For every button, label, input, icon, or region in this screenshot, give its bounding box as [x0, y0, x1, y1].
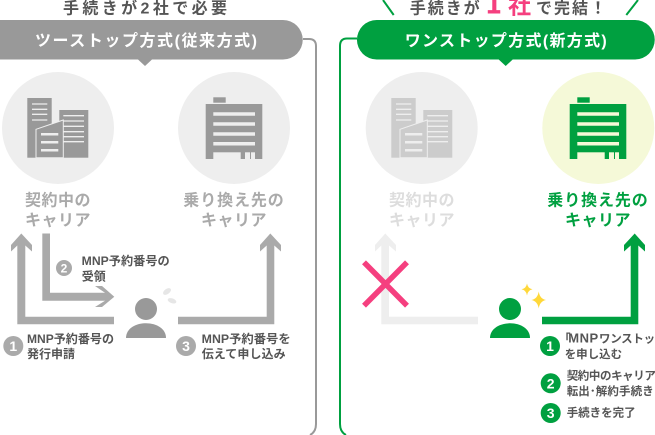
heading: needs two companies: 手続きが2社で必要	[63, 0, 227, 18]
step 3: 3	[182, 338, 190, 354]
icon: worried user	[126, 287, 177, 338]
current carrier label (disabled): キャリア	[389, 212, 455, 230]
step 2: 転出･解約手続き	[567, 384, 654, 398]
step 3: 手続きを完了	[567, 406, 636, 420]
current carrier label: キャリア	[25, 212, 91, 230]
heading: completes with one company: で完結！	[536, 0, 606, 18]
new carrier icon (active)	[542, 72, 654, 184]
icon: cross mark	[364, 262, 407, 306]
step 2	[56, 253, 170, 284]
new carrier label (active): 乗り換え先の	[547, 190, 649, 210]
new carrier icon	[178, 72, 290, 184]
new carrier label: キャリア	[201, 212, 267, 230]
step 1: MNP予約番号の	[27, 331, 114, 346]
title pill	[0, 20, 303, 66]
step 2: 受領	[82, 268, 106, 284]
new carrier label: 乗り換え先の	[183, 190, 285, 210]
step 1: MNP	[568, 331, 599, 346]
panel: two-stop method	[0, 0, 316, 435]
step 2: MNP予約番号の	[82, 253, 170, 268]
step 1: を申し込む	[565, 347, 622, 361]
current carrier label (disabled): 契約中の	[389, 190, 455, 210]
step 2: 2	[61, 262, 68, 276]
step 1: 発行申請	[27, 346, 75, 361]
current carrier icon (disabled)	[366, 72, 478, 184]
step 3: MNP予約番号を	[202, 331, 291, 346]
step 3: 3	[547, 405, 555, 421]
arrow: cancelled route	[375, 234, 478, 324]
step 1	[3, 331, 114, 361]
arrow: step 2	[42, 234, 114, 307]
current carrier icon	[2, 72, 114, 184]
step 1: 「	[559, 333, 571, 346]
step 2	[541, 368, 655, 398]
arrow: step 3	[178, 234, 281, 324]
step 1: 1	[546, 338, 554, 354]
step 1	[540, 331, 655, 361]
title pill	[357, 20, 655, 66]
step 2: 2	[547, 375, 555, 391]
panel: one-stop method	[340, 0, 655, 435]
step 3	[176, 331, 291, 361]
heading: completes with one company	[383, 0, 638, 22]
arrow: one-stop route	[542, 234, 645, 324]
icon: happy user	[490, 284, 546, 338]
step 1: 1	[9, 338, 17, 354]
step 3: 伝えて申し込み	[202, 346, 286, 361]
current carrier label: 契約中の	[25, 190, 91, 210]
panel frame	[340, 38, 357, 435]
new carrier label (active): キャリア	[565, 212, 631, 230]
panel frame	[303, 39, 316, 435]
arrow: step 1	[11, 234, 114, 324]
heading: completes with one company: 手続きが	[410, 0, 480, 18]
title pill: ワンストップ方式(新方式)	[405, 31, 607, 50]
step 3	[541, 403, 636, 423]
title pill: ツーストップ方式(従来方式)	[35, 31, 257, 50]
